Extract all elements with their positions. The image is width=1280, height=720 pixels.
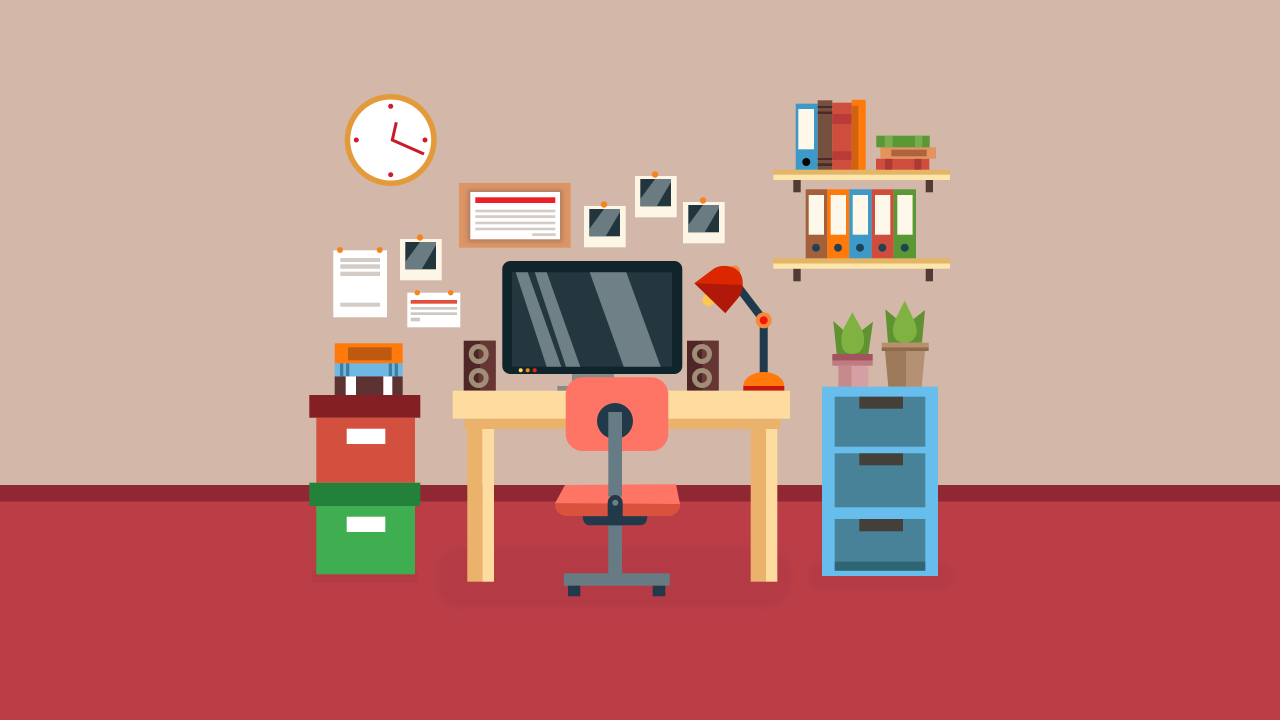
floor shadow: boxes [312, 570, 418, 583]
red storage box [309, 395, 420, 483]
lower shelf [773, 258, 950, 281]
floor shadow: desk [436, 547, 792, 608]
office chair [555, 377, 680, 596]
desk [453, 391, 790, 582]
lower shelf binders [806, 189, 916, 258]
floor shadow: cabinet [808, 562, 955, 590]
plant: brown pot [882, 301, 929, 387]
pinned photo 1 [400, 234, 442, 280]
desk lamp [694, 266, 784, 391]
pinned photo 3 [635, 171, 677, 217]
pinned note: small [407, 290, 460, 327]
filing cabinet [822, 387, 938, 576]
monitor stand [557, 374, 627, 391]
upper shelf [773, 170, 950, 192]
baseboard [0, 485, 1280, 502]
left speaker [464, 341, 496, 391]
pinned photo 2 [584, 201, 626, 247]
plant: small pink pot [832, 312, 873, 387]
framed certificate [459, 183, 571, 248]
upper shelf binders and books [796, 100, 936, 170]
floor [0, 502, 1280, 720]
right speaker [687, 341, 719, 391]
pinned note: tall [333, 247, 387, 317]
wall [0, 0, 1280, 485]
stacked books on boxes [335, 343, 403, 395]
monitor [502, 261, 682, 374]
green storage box [309, 483, 420, 574]
pinned photo 4 [683, 197, 725, 243]
wall clock [345, 94, 437, 186]
